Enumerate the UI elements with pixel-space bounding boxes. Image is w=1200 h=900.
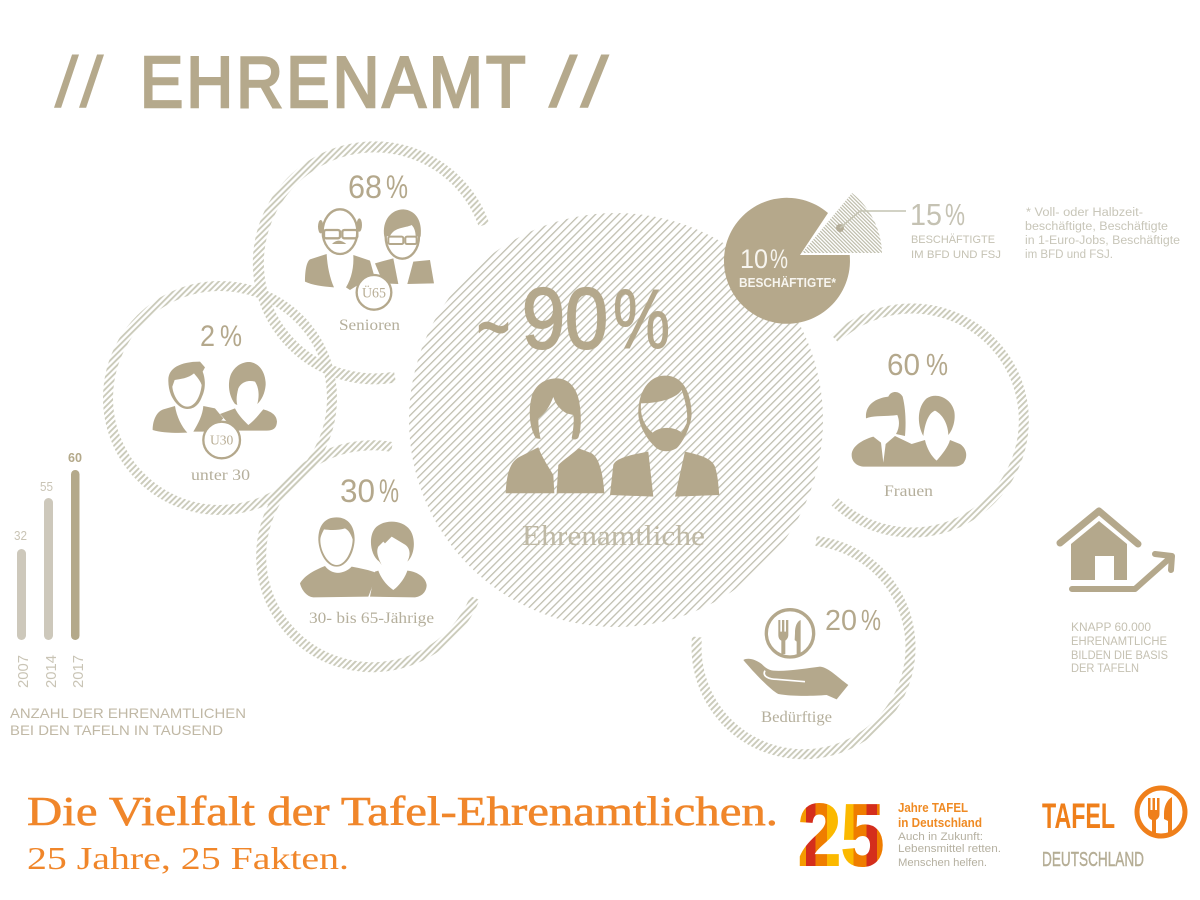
icon: young people xyxy=(153,362,277,458)
icon: adults xyxy=(300,517,427,597)
chart caption: BEI DEN TAFELN IN TAUSEND xyxy=(10,722,223,738)
big percentage: ~ xyxy=(477,282,510,371)
callout: 15 percent: % xyxy=(945,197,965,232)
title: // xyxy=(54,43,104,123)
percentage: 30 xyxy=(340,473,375,509)
bar chart: number of volunteers xyxy=(14,450,87,688)
percentage: % xyxy=(220,320,242,353)
percentage: % xyxy=(379,473,399,509)
logo: 25 Jahre: 25 xyxy=(798,787,884,884)
percentage xyxy=(340,473,399,509)
big percentage xyxy=(477,271,670,371)
bar chart: number of volunteers: 2014 xyxy=(43,655,60,688)
callout: 15 percent: 15 xyxy=(910,197,942,232)
title: EHRENAMT xyxy=(140,42,529,123)
percentage: 20 xyxy=(825,605,857,637)
panel: Frauen xyxy=(835,309,1024,532)
label: Frauen xyxy=(884,483,933,500)
pie label xyxy=(739,244,836,290)
logo: 25 Jahre: Menschen helfen. xyxy=(898,857,987,869)
icon: plate on hand xyxy=(743,610,848,699)
panel: unter 30 xyxy=(108,286,332,510)
panel: Senioren xyxy=(258,147,484,379)
panel: 30- bis 65-Jährige xyxy=(261,445,475,667)
percentage xyxy=(348,169,408,205)
title xyxy=(54,42,610,123)
text: knapp 60.000: BILDEN DIE BASIS xyxy=(1071,650,1168,662)
percentage xyxy=(200,320,242,353)
label: Ehrenamtliche xyxy=(522,521,705,552)
bar chart: number of volunteers: 2017 xyxy=(70,655,87,688)
bar chart: number of volunteers: 32 xyxy=(14,528,27,543)
percentage: 2 xyxy=(200,320,215,353)
percentage: % xyxy=(861,605,881,637)
logo: 25 Jahre: Lebensmittel retten. xyxy=(898,843,1001,855)
footnote: beschäftigte, Beschäftigte xyxy=(1025,221,1168,233)
text: knapp 60.000: DER TAFELN xyxy=(1071,663,1139,675)
icon: house with arrow xyxy=(1060,511,1172,589)
text: knapp 60.000 xyxy=(1071,622,1168,675)
pie label: 10 xyxy=(740,244,768,274)
pie label: BESCHÄFTIGTE* xyxy=(739,275,836,290)
footnote: im BFD und FSJ. xyxy=(1025,249,1113,261)
text: knapp 60.000: EHRENAMTLICHE xyxy=(1071,636,1167,648)
panel: Ehrenamtliche main circle xyxy=(409,213,823,627)
percentage xyxy=(825,605,881,637)
footer heading: Die Vielfalt der Tafel-Ehrenamtlichen. xyxy=(27,788,778,834)
panel: Bedürftige xyxy=(697,541,911,754)
big percentage: 90 xyxy=(522,271,608,367)
percentage: 68 xyxy=(348,169,382,205)
icon: woman and man xyxy=(506,376,719,497)
icon: young people: U30 xyxy=(210,434,233,449)
footnote: in 1-Euro-Jobs, Beschäftigte xyxy=(1025,235,1180,247)
footer heading xyxy=(27,788,778,876)
chart caption: ANZAHL DER EHRENAMTLICHEN xyxy=(10,705,246,721)
icon: seniors xyxy=(305,209,434,310)
percentage: 60 xyxy=(887,347,920,382)
callout: 15 percent xyxy=(910,197,1001,261)
logo: 25 Jahre: in Deutschland xyxy=(898,815,982,830)
logo: Tafel Deutschland: DEUTSCHLAND xyxy=(1042,849,1144,871)
pie label: % xyxy=(770,244,788,274)
label: unter 30 xyxy=(191,467,250,484)
footer heading: 25 Jahre, 25 Fakten. xyxy=(27,840,349,876)
bar chart: number of volunteers: 55 xyxy=(40,479,53,494)
text: knapp 60.000: KNAPP 60.000 xyxy=(1071,622,1151,634)
logo: 25 Jahre xyxy=(798,787,1001,884)
percentage: % xyxy=(926,347,948,382)
callout: 15 percent: IM BFD UND FSJ xyxy=(911,249,1001,261)
chart caption xyxy=(10,705,246,738)
percentage: % xyxy=(386,169,408,205)
pie chart: Beschäftigte xyxy=(724,193,906,324)
percentage xyxy=(887,347,948,382)
logo: 25 Jahre: Auch in Zukunft: xyxy=(898,831,983,843)
callout: 15 percent: BESCHÄFTIGTE xyxy=(911,234,995,246)
label: 30- bis 65-Jährige xyxy=(309,610,434,627)
logo: Tafel Deutschland xyxy=(1042,788,1185,871)
bar chart: number of volunteers: 2007 xyxy=(15,655,32,688)
logo: 25 Jahre: Jahre TAFEL xyxy=(898,800,968,815)
label: Senioren xyxy=(339,317,400,334)
footnote xyxy=(1025,207,1180,261)
label: Bedürftige xyxy=(761,709,832,726)
logo: Tafel Deutschland: TAFEL xyxy=(1042,797,1115,836)
icon: women xyxy=(852,392,966,467)
bar chart: number of volunteers: 60 xyxy=(68,450,82,465)
footnote: * Voll- oder Halbzeit- xyxy=(1026,207,1143,219)
title: // xyxy=(548,43,610,123)
big percentage: % xyxy=(613,272,670,366)
icon: seniors: Ü65 xyxy=(362,285,386,302)
